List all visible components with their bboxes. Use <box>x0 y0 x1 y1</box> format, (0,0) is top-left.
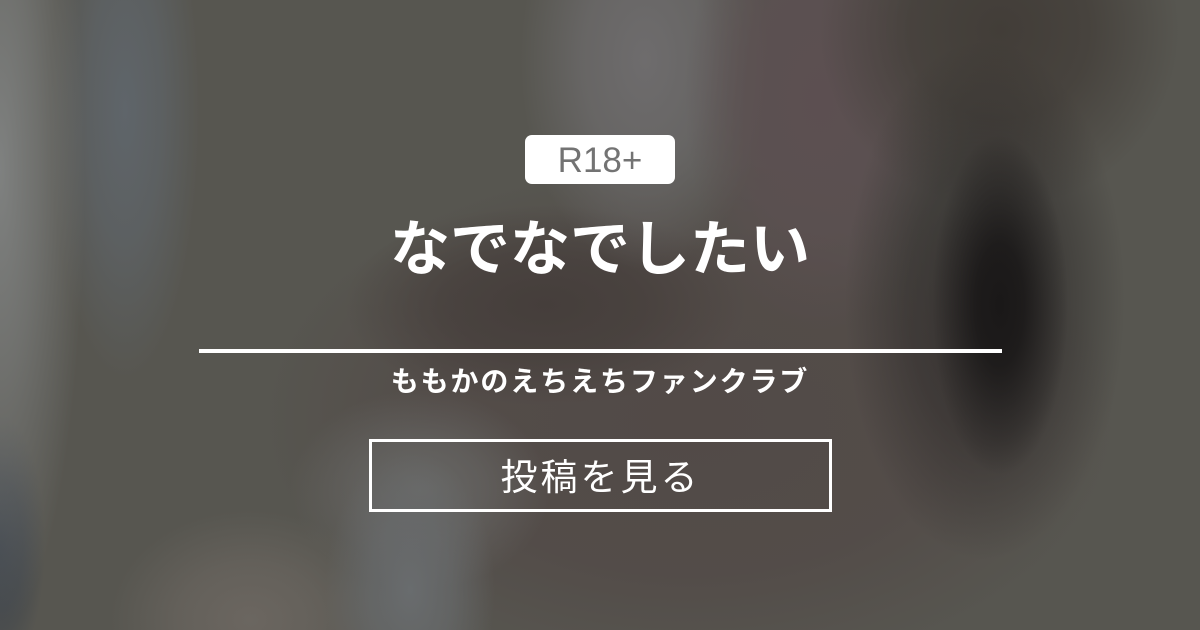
divider line <box>199 349 1002 353</box>
title: なでなでしたい <box>390 216 810 283</box>
rating badge <box>525 135 675 184</box>
rating badge: R18+ <box>558 141 642 180</box>
view posts button <box>369 439 832 512</box>
fan club name: ももかのえちえちファンクラブ <box>391 366 809 397</box>
view posts button: 投稿を見る <box>500 457 700 498</box>
